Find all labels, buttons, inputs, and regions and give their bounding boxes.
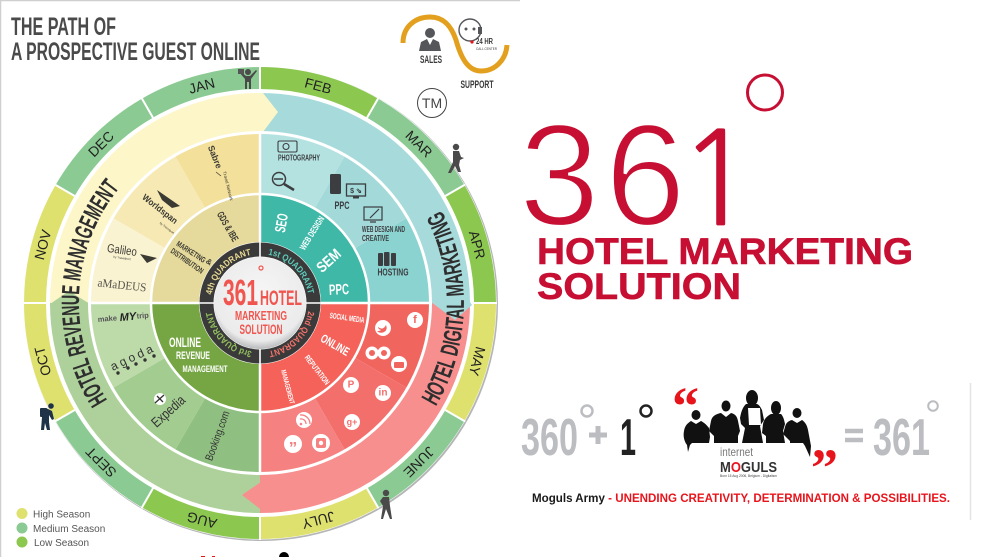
equation — [521, 376, 938, 498]
quadrant labels: 3rd QUADRANT — [206, 313, 252, 358]
web design label: WEB DESIGN AND — [362, 225, 405, 234]
title: A PROSPECTIVE GUEST ONLINE — [11, 38, 260, 66]
big heading number: 3 — [519, 94, 600, 256]
panel: distribution brands — [97, 144, 240, 295]
internet moguls logo: internet — [720, 445, 754, 459]
icon: tripadvisor — [366, 346, 390, 360]
curved heading: revenue management: HOTEL REVENUE MANAGEMENT — [62, 177, 118, 408]
legend: low season: Low Season — [34, 538, 89, 549]
icon: moguls team silhouettes — [684, 390, 811, 457]
icon: phone and monitor: $ ⇘ — [350, 188, 362, 195]
Galileo logo: Galileo — [106, 241, 138, 259]
Expedia logo: Expedia — [148, 392, 188, 430]
panel: third quadrant labels: MANAGEMENT — [182, 364, 228, 374]
subtitle: HOTEL MARKETING — [537, 231, 913, 272]
person one — [684, 410, 710, 452]
icon: hosting servers — [378, 252, 396, 266]
big heading number: 6 — [605, 94, 686, 256]
icon: key magnifier — [272, 172, 294, 190]
icon: sales person — [419, 28, 441, 51]
panel: third quadrant labels: REVENUE — [176, 350, 210, 362]
icon: facebook — [407, 312, 423, 328]
month labels — [31, 74, 489, 533]
361 degrees: 361 — [873, 409, 930, 467]
support label: SUPPORT — [460, 79, 494, 91]
tagline: Moguls Army - UNENDING CREATIVITY, DETERMINATION & POSSIBILITIES. — [532, 493, 950, 505]
trademark badge — [418, 88, 446, 118]
centre logo: MARKETING — [235, 308, 287, 323]
dark quadrant band — [206, 250, 314, 356]
call center label: 24 HR — [476, 37, 493, 46]
icon: linkedin: in — [379, 388, 387, 398]
person four — [762, 401, 785, 443]
photography label: PHOTOGRAPHY — [278, 154, 320, 162]
call center label — [476, 37, 497, 51]
subtitle — [537, 231, 913, 307]
wheel — [24, 67, 498, 541]
panel: first quadrant labels: PPC — [329, 281, 350, 299]
make my trip logo: MY — [119, 311, 138, 324]
internet moguls logo: MOGULS — [720, 459, 777, 476]
equals sign — [845, 431, 863, 440]
marketing and distribution label: & — [204, 257, 214, 267]
quadrant labels — [206, 248, 314, 358]
icon: quotes — [284, 435, 302, 458]
panel: online agencies — [97, 310, 233, 462]
arrow tips — [50, 93, 472, 512]
icon: person with arms raised — [238, 69, 257, 89]
panel: second quadrant labels: REPUTATION — [303, 353, 331, 387]
panel: second quadrant labels — [279, 311, 365, 405]
month labels: APR — [466, 229, 489, 261]
icon: camera — [278, 141, 297, 152]
icon: rss — [296, 412, 312, 428]
sales and support badge — [403, 17, 507, 91]
orange wave — [403, 17, 507, 71]
Galileo logo — [106, 241, 157, 263]
person two — [709, 400, 740, 443]
icon: pinterest — [343, 377, 359, 393]
web design label — [362, 225, 405, 243]
icon: standing person — [380, 490, 392, 519]
month labels: MAR — [402, 127, 436, 161]
quadrant labels: 1st QUADRANT — [268, 249, 314, 293]
icon: headset — [459, 19, 482, 44]
big heading number: 1 — [677, 114, 756, 244]
month labels: NOV — [31, 227, 54, 261]
big heading number — [519, 75, 782, 256]
closing quote: ” — [811, 438, 838, 498]
PPC label: PPC — [334, 200, 350, 212]
web design label: CREATIVE — [362, 234, 389, 243]
Galileo logo: by Travelport — [113, 255, 131, 261]
panel: second quadrant labels: SOCIAL MEDIA — [329, 311, 365, 325]
person three — [740, 390, 764, 443]
panel: digital services — [272, 141, 409, 278]
internet moguls logo: Born 15 Aug 2006, Belgium - Digitalism — [720, 474, 777, 478]
person five — [783, 408, 811, 457]
curved heading: digital marketing: HOTEL DIGITAL MARKETING — [421, 212, 464, 406]
panel: third quadrant labels: ONLINE — [169, 334, 201, 350]
centre disc — [214, 257, 306, 349]
quadrant labels: 4th QUADRANT — [206, 248, 250, 295]
legend: medium season: Medium Season — [33, 524, 105, 535]
icon: youtube — [391, 356, 407, 372]
Amadeus logo: aMaDEUS — [97, 275, 147, 295]
plus sign — [589, 426, 607, 444]
month labels: OCT — [31, 344, 54, 378]
Worldspan logo: Worldspan — [140, 192, 180, 226]
panel: second quadrant labels: MANAGEMENT — [279, 369, 295, 405]
icon: quotes: ” — [289, 438, 297, 458]
stray marks at bottom edge — [201, 552, 289, 557]
title: THE PATH OF — [11, 13, 116, 41]
call center label: CALL CENTER — [476, 46, 497, 51]
icon: walking person — [448, 144, 464, 173]
panel: social icons — [284, 312, 423, 458]
icon: pinterest: P — [348, 380, 355, 390]
360 degrees: 360 — [521, 409, 578, 467]
marketing and distribution label: MARKETING — [175, 239, 207, 265]
month labels: AUG — [185, 509, 218, 532]
hosting label: HOSTING — [378, 268, 409, 278]
legend — [16, 508, 105, 549]
GDS label: GDS & IBE — [214, 210, 240, 244]
month labels: SEPT — [82, 443, 119, 481]
Sabre logo: Travel Network — [222, 171, 234, 202]
icon: facebook: f — [413, 314, 417, 326]
centre logo — [223, 266, 302, 337]
centre logo: HOTEL — [260, 287, 302, 310]
degree mark — [748, 75, 782, 110]
strategy ring — [50, 93, 472, 512]
month labels: MAY — [466, 345, 489, 378]
centre logo: SOLUTION — [240, 321, 282, 337]
opening quote: “ — [672, 376, 699, 436]
icon: twitter — [375, 320, 391, 336]
1 degree: 1 — [620, 409, 636, 467]
icon: linkedin — [375, 385, 391, 401]
agoda logo: agoda — [108, 340, 158, 374]
panel: first quadrant labels — [272, 212, 350, 299]
icon: instagram — [312, 434, 330, 452]
panel: third quadrant labels — [169, 334, 228, 374]
month labels: FEB — [303, 74, 333, 97]
361 degrees — [873, 401, 938, 467]
panel: first quadrant labels: SEM — [313, 246, 345, 276]
Worldspan logo: by Travelport — [159, 221, 175, 235]
month labels: DEC — [85, 128, 117, 160]
month labels: JUNE — [401, 444, 438, 481]
Booking.com logo: Booking.com — [203, 410, 233, 462]
Sabre logo — [206, 144, 234, 202]
quadrant labels: 2nd QUADRANT — [270, 311, 314, 358]
panel: first quadrant labels: WEB DESIGN — [298, 214, 326, 252]
title — [11, 13, 260, 66]
icon: google plus: g+ — [347, 417, 357, 427]
make my trip logo: make — [97, 313, 117, 324]
internet moguls logo — [720, 445, 777, 478]
Sabre logo: Sabre — [206, 144, 224, 170]
subtitle: SOLUTION — [537, 266, 741, 307]
icon: hiker — [40, 403, 54, 430]
page border — [0, 0, 520, 557]
sales label: SALES — [420, 54, 442, 66]
make my trip logo — [97, 310, 150, 326]
icon: design monitor — [364, 207, 382, 222]
trademark badge: TM — [422, 95, 442, 111]
centre logo: 361 — [223, 272, 258, 313]
month ring — [35, 78, 485, 528]
legend: high season: High Season — [33, 510, 90, 520]
month labels: JULY — [299, 508, 336, 533]
icon: google plus — [344, 414, 360, 430]
month labels: JAN — [187, 75, 217, 97]
wheel shadow — [24, 67, 498, 541]
services ring — [120, 163, 400, 443]
marketing and distribution label: DISTRIBUTION — [169, 246, 205, 276]
panel: first quadrant labels: SEO — [272, 212, 292, 234]
quadrant ring — [176, 218, 344, 388]
make my trip logo: trip — [136, 311, 149, 321]
panel: second quadrant labels: ONLINE — [318, 331, 352, 359]
